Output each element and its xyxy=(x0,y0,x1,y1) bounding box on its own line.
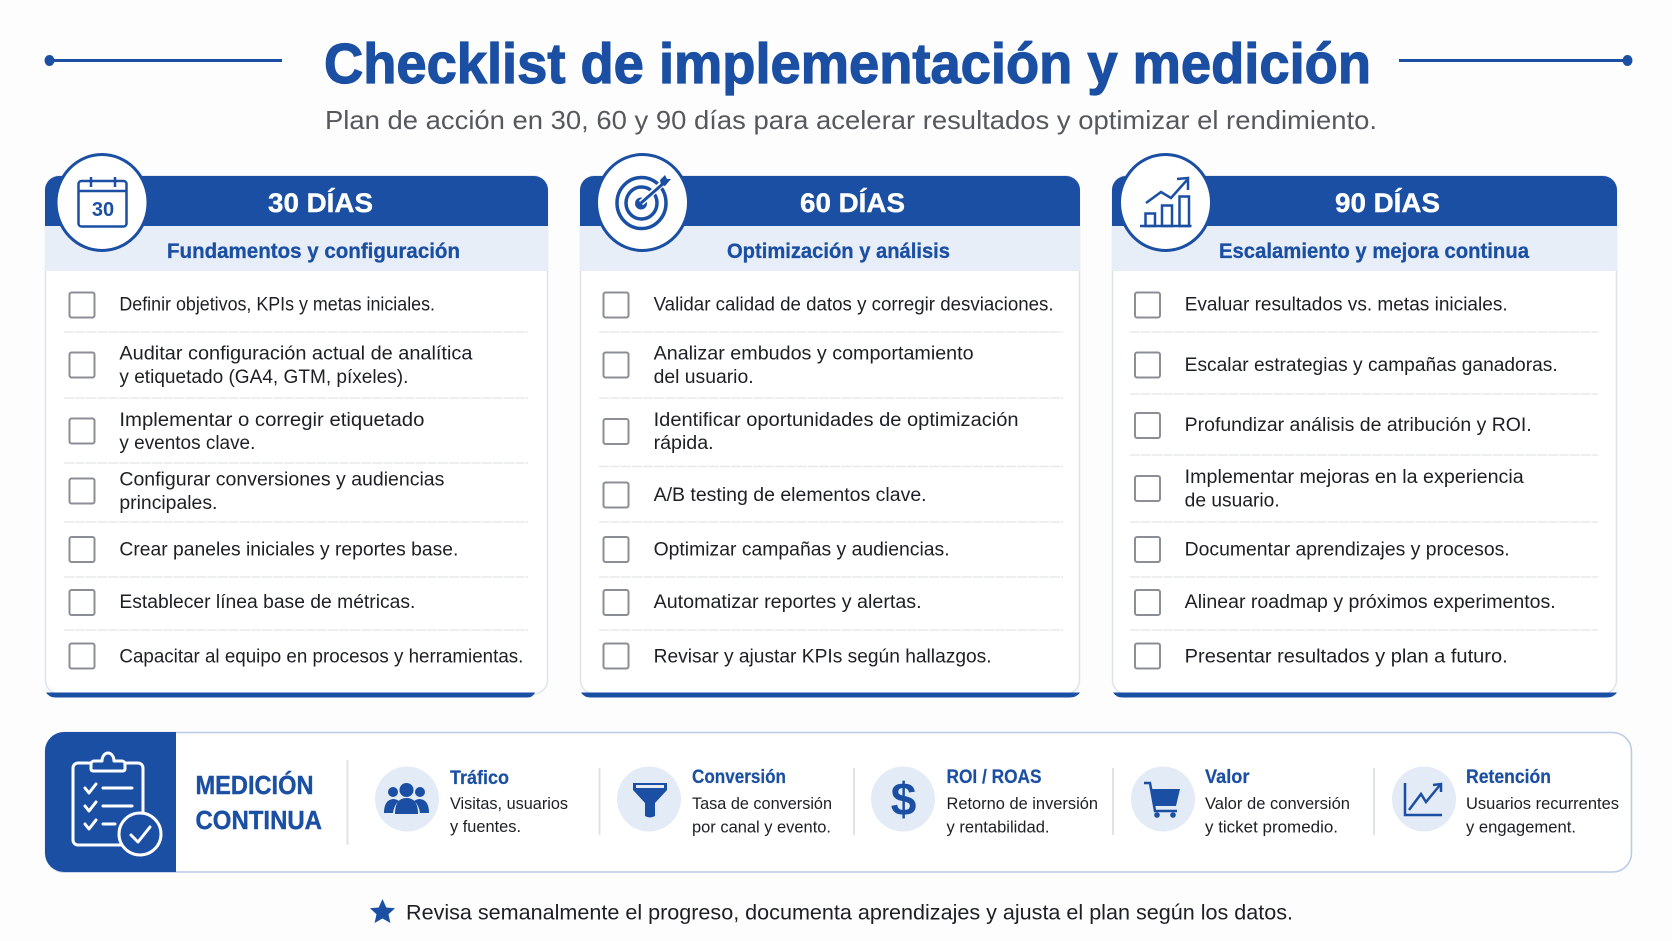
checklist item 3: Identificar oportunidades de optimización xyxy=(654,410,1019,431)
checklist item 3 xyxy=(70,410,424,454)
footer note xyxy=(370,899,1293,924)
panel heading: 30 DÍAS xyxy=(268,187,373,218)
bottom accent bar xyxy=(1113,692,1617,698)
checklist item 3 xyxy=(604,410,1019,454)
metric: tráfico xyxy=(375,766,568,836)
metric: tráfico: Tráfico xyxy=(450,768,509,789)
icon: people xyxy=(375,766,439,832)
checklist item 6: Alinear roadmap y próximos experimentos. xyxy=(1185,592,1556,613)
subtitle band xyxy=(45,226,548,271)
checklist item 2: y etiquetado (GA4, GTM, píxeles). xyxy=(119,367,408,388)
metric: conversión: Conversión xyxy=(692,767,786,788)
metric: conversión: por canal y evento. xyxy=(692,818,831,836)
checklist item 6: Establecer línea base de métricas. xyxy=(119,592,415,613)
checklist item 2 xyxy=(604,344,974,388)
bottom accent bar xyxy=(46,692,535,698)
icon: dollar: $ xyxy=(891,773,916,825)
metric: valor xyxy=(1131,766,1350,836)
icon: line chart xyxy=(1392,766,1456,832)
metric: roi / roas: ROI / ROAS xyxy=(946,767,1042,788)
metric: roi / roas: y rentabilidad. xyxy=(946,818,1050,836)
metric: retención: Usuarios recurrentes xyxy=(1466,795,1619,813)
header xyxy=(44,32,1632,135)
panel: 30 días xyxy=(45,154,548,698)
checklist item 4: A/B testing de elementos clave. xyxy=(654,485,927,506)
checklist item 4: Implementar mejoras en la experiencia xyxy=(1185,467,1524,488)
icon: dollar xyxy=(871,766,935,832)
checklist item 1: Evaluar resultados vs. metas iniciales. xyxy=(1185,294,1508,316)
panel heading: 60 DÍAS xyxy=(800,187,905,218)
checklist item 1: Definir objetivos, KPIs y metas iniciales. xyxy=(119,294,435,316)
panel subheading: Optimización y análisis xyxy=(727,239,950,263)
checklist item 6: Automatizar reportes y alertas. xyxy=(654,592,922,613)
checklist item 3: Profundizar análisis de atribución y ROI. xyxy=(1185,415,1532,436)
checklist item 6 xyxy=(604,590,922,615)
checklist item 5: Optimizar campañas y audiencias. xyxy=(654,540,950,561)
checklist item 7: Revisar y ajustar KPIs según hallazgos. xyxy=(654,646,992,667)
checklist item 2: Auditar configuración actual de analítica xyxy=(119,344,473,364)
metric: retención: Retención xyxy=(1466,767,1551,788)
header band xyxy=(1112,176,1617,226)
checklist item 1 xyxy=(70,292,435,318)
panel subheading: Escalamiento y mejora continua xyxy=(1219,239,1530,263)
checklist item 4: de usuario. xyxy=(1185,490,1280,512)
icon: calendar xyxy=(56,154,148,250)
checklist item 4 xyxy=(1135,467,1524,512)
subtitle: Plan de acción en 30, 60 y 90 días para acelerar resultados y optimizar el rendimiento. xyxy=(325,105,1377,135)
checklist item 4: principales. xyxy=(119,493,217,514)
panel: medición continua xyxy=(45,732,1632,872)
subtitle band xyxy=(1112,226,1617,271)
checklist item 2: Escalar estrategias y campañas ganadoras. xyxy=(1185,355,1558,376)
metric: roi / roas: Retorno de inversión xyxy=(946,795,1098,813)
measurement heading: MEDICIÓN xyxy=(196,770,314,800)
checklist item 5: Crear paneles iniciales y reportes base. xyxy=(119,540,458,561)
metric: retención: y engagement. xyxy=(1466,818,1576,836)
panel subheading: Fundamentos y configuración xyxy=(167,239,460,263)
checklist item 7 xyxy=(1135,644,1508,668)
measurement heading xyxy=(196,770,322,835)
subtitle band xyxy=(580,226,1080,271)
right title rule xyxy=(1399,55,1632,66)
left title rule xyxy=(44,55,282,66)
header band xyxy=(580,176,1080,226)
checklist item 2: del usuario. xyxy=(654,367,754,388)
checklist item 4 xyxy=(70,470,444,514)
panel heading: 90 DÍAS xyxy=(1335,187,1440,218)
checklist item 3: rápida. xyxy=(654,433,714,454)
metric: conversión: Tasa de conversión xyxy=(692,795,832,813)
icon: growth chart xyxy=(1120,154,1212,250)
metric: tráfico: y fuentes. xyxy=(450,818,521,836)
panel: 90 días xyxy=(1112,154,1617,698)
icon: calendar: 30 xyxy=(92,199,114,221)
icon: cart xyxy=(1131,766,1195,832)
checklist item 1: Validar calidad de datos y corregir desviaciones. xyxy=(654,294,1054,316)
panel: 60 días xyxy=(580,154,1080,698)
measurement heading: CONTINUA xyxy=(196,805,322,835)
footer text: Revisa semanalmente el progreso, documenta aprendizajes y ajusta el plan según los datos. xyxy=(406,900,1293,924)
metric: conversión xyxy=(617,766,832,836)
checklist item 4 xyxy=(604,482,927,508)
metric: tráfico: Visitas, usuarios xyxy=(450,795,568,813)
icon: funnel xyxy=(617,766,681,832)
icon: star xyxy=(370,899,395,923)
bottom accent bar xyxy=(581,692,1080,698)
checklist item 3: Implementar o corregir etiquetado xyxy=(119,410,424,431)
metric: roi / roas xyxy=(871,766,1098,836)
title: Checklist de implementación y medición xyxy=(324,32,1371,96)
metric: retención xyxy=(1392,766,1619,836)
checklist item 2: Analizar embudos y comportamiento xyxy=(654,344,974,364)
header band xyxy=(45,176,548,226)
blue label block xyxy=(45,732,176,872)
checklist item 2 xyxy=(70,344,473,388)
checklist item 5: Documentar aprendizajes y procesos. xyxy=(1185,540,1510,561)
metric: valor: y ticket promedio. xyxy=(1205,818,1338,836)
checklist item 4: Configurar conversiones y audiencias xyxy=(119,470,444,490)
icon: target xyxy=(596,154,688,250)
icon: clipboard checklist xyxy=(73,753,161,855)
metric: valor: Valor xyxy=(1205,767,1250,788)
metric: valor: Valor de conversión xyxy=(1205,795,1350,813)
checklist item 7: Capacitar al equipo en procesos y herramientas. xyxy=(119,646,523,667)
checklist item 7: Presentar resultados y plan a futuro. xyxy=(1185,646,1508,667)
checklist item 3: y eventos clave. xyxy=(119,433,255,454)
